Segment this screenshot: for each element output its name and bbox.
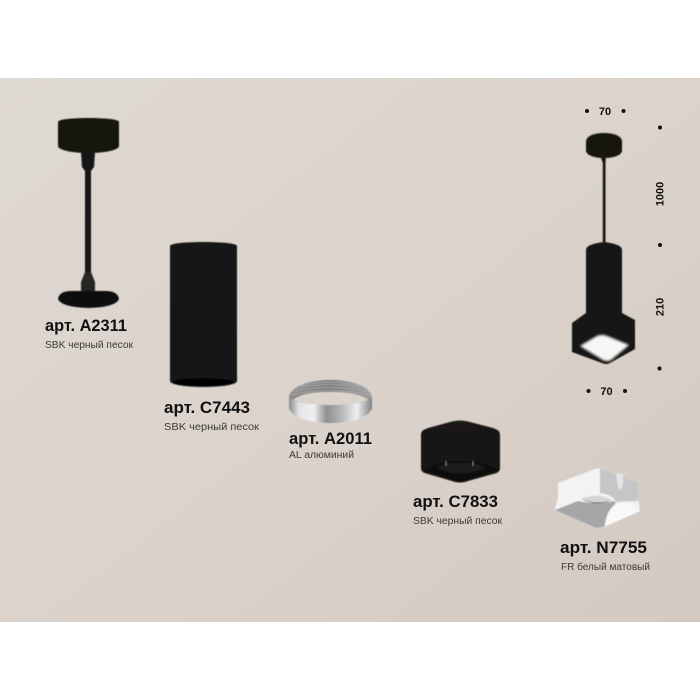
label: A2311: арт. A2311 — [45, 317, 127, 335]
cylinder body — [170, 242, 237, 387]
product: C7833 square housing — [421, 420, 500, 482]
light diffuser — [580, 335, 629, 361]
inner recess — [555, 501, 616, 528]
label: A2011 — [289, 430, 372, 461]
label: A2311 — [45, 317, 134, 351]
label: C7443 — [164, 399, 260, 433]
cable — [600, 155, 606, 242]
canopy — [586, 133, 622, 158]
canopy — [58, 118, 119, 153]
dimension: bottom width 70 — [586, 386, 627, 398]
dimension: top width 70 — [585, 106, 626, 118]
assembled pendant lamp — [572, 133, 635, 364]
dimension: top width 70: 70 — [599, 106, 611, 118]
mounting disc — [58, 291, 119, 308]
lower connector — [81, 272, 95, 294]
product: C7443 cylinder — [170, 242, 237, 387]
ring hole — [293, 392, 368, 405]
square shade — [572, 313, 635, 364]
label: C7833: арт. C7833 — [413, 493, 498, 511]
white reflector — [605, 503, 640, 526]
inner recess — [436, 463, 486, 473]
dimension: bottom width 70: 70 — [600, 386, 613, 398]
clip — [616, 473, 623, 491]
label: C7833: SBK черный песок — [413, 516, 503, 527]
cable — [81, 152, 95, 273]
label: N7755: арт. N7755 — [560, 539, 647, 557]
dimension: height 210 — [654, 298, 666, 370]
dimension: height 1000 — [654, 126, 666, 247]
right shaded side — [600, 468, 638, 502]
cylinder — [586, 242, 622, 315]
product: A2311 suspension — [58, 118, 119, 308]
thread lines — [291, 382, 370, 395]
label: C7833 — [413, 493, 503, 527]
housing opening — [424, 461, 498, 482]
label: A2011: арт. A2011 — [289, 430, 372, 448]
background panel — [0, 78, 700, 622]
dimension: height 1000: 1000 — [654, 182, 666, 206]
front band — [289, 397, 372, 423]
product: A2011 ring — [289, 380, 372, 423]
label: N7755: FR белый матовый — [561, 561, 650, 573]
threaded back band — [289, 380, 372, 404]
dimension: height 210: 210 — [654, 298, 666, 316]
label: A2011: AL алюминий — [289, 450, 354, 461]
mounting pins — [446, 461, 473, 466]
label: C7443: арт. C7443 — [164, 399, 250, 417]
label: N7755 — [560, 539, 650, 573]
label: C7443: SBK черный песок — [164, 422, 260, 433]
product: N7755 white insert — [555, 468, 640, 528]
lens rim — [581, 496, 612, 502]
housing body — [421, 420, 500, 482]
insert body — [555, 468, 640, 528]
cylinder opening — [173, 378, 234, 386]
label: A2311: SBK черный песок — [45, 340, 134, 351]
